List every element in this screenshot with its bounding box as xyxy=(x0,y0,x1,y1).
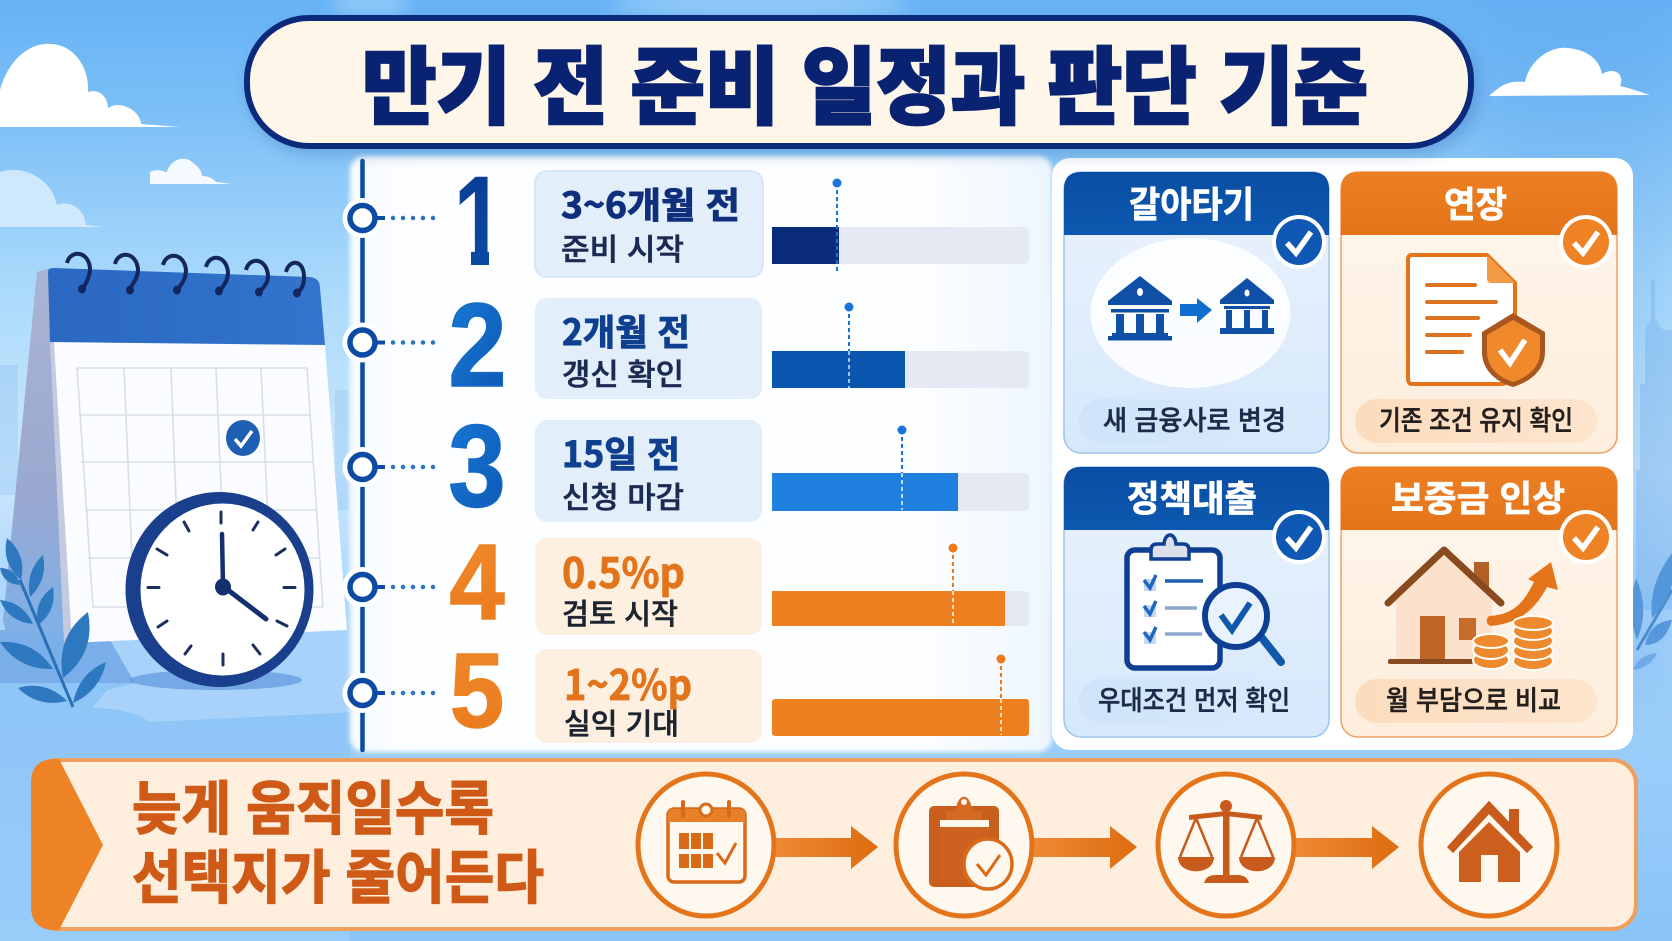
bar 3 xyxy=(772,426,1029,511)
cloud top right xyxy=(1489,48,1650,96)
number 4: 4 xyxy=(449,521,505,642)
calendar page xyxy=(50,342,347,643)
timeline line xyxy=(360,161,365,750)
label 1: 3~6개월 전 xyxy=(561,177,740,229)
icon: checklist and magnifier xyxy=(1127,535,1281,668)
check badge xyxy=(1272,510,1326,564)
label 4: 검토 시작 xyxy=(562,591,678,633)
label 5: 1~2%p xyxy=(564,652,692,713)
card: 갈아타기: 갈아타기 xyxy=(1129,176,1254,228)
card: 정책대출: 정책대출 xyxy=(1127,470,1257,522)
number 5: 5 xyxy=(450,631,504,750)
calendar illustration xyxy=(3,254,347,643)
check badge xyxy=(1559,215,1613,269)
number 2: 2 xyxy=(448,279,507,411)
card: 연장: 연장 xyxy=(1444,176,1507,228)
bar 1 xyxy=(772,178,1029,271)
banner message: 선택지가 줄어든다 xyxy=(132,831,544,915)
title banner: 만기 전 준비 일정과 판단 기준 xyxy=(362,21,1368,142)
calendar rings xyxy=(67,254,304,298)
check badge xyxy=(1272,215,1326,269)
label 1 xyxy=(535,171,763,277)
icon: house circle xyxy=(1421,774,1557,916)
decorative leaves left xyxy=(0,538,106,707)
label 3: 신청 마감 xyxy=(562,473,684,517)
card: 연장 xyxy=(1341,172,1617,453)
label 5: 실익 기대 xyxy=(564,701,679,743)
icon: scales circle xyxy=(1158,774,1294,916)
card: 보증금 인상: 보중금 인상 xyxy=(1391,470,1565,522)
bar 2 xyxy=(772,302,1029,388)
icon: document with shield xyxy=(1408,255,1545,387)
caption pill: 월 부담으로 비교 xyxy=(1386,679,1561,718)
cloud top left xyxy=(0,44,180,127)
number 1: 1 xyxy=(453,149,505,293)
timeline nodes xyxy=(342,198,436,713)
card: 보증금 인상 xyxy=(1341,467,1617,737)
cloud small xyxy=(150,159,232,184)
calendar grid xyxy=(77,368,323,607)
panel: timeline xyxy=(342,149,1052,752)
label 3 xyxy=(535,420,762,522)
arrow 2 xyxy=(1033,826,1137,869)
label 2 xyxy=(535,298,762,399)
number 3: 3 xyxy=(448,401,506,531)
calendar back flap xyxy=(3,268,72,640)
chevron xyxy=(31,759,103,930)
panel: options xyxy=(1052,158,1633,750)
card: 정책대출 xyxy=(1064,467,1329,737)
label 4: 0.5%p xyxy=(562,540,685,601)
bar 4 xyxy=(772,544,1029,626)
check badge xyxy=(1559,510,1613,564)
label 2: 갱신 확인 xyxy=(562,350,684,394)
icon: bank transfer xyxy=(1090,238,1290,388)
cloud left mid xyxy=(0,170,105,227)
label 4 xyxy=(535,538,762,635)
icon: house, coins and rising arrow xyxy=(1388,550,1558,670)
label 2: 2개월 전 xyxy=(562,304,690,356)
arrow 3 xyxy=(1295,826,1399,869)
calendar header xyxy=(48,268,325,345)
banner message xyxy=(132,762,544,915)
caption pill: 우대조건 먼저 확인 xyxy=(1098,679,1290,718)
icon: calendar circle xyxy=(638,774,774,916)
icon: clipboard circle xyxy=(896,774,1032,916)
clock xyxy=(126,492,314,690)
banner message: 늦게 움직일수록 xyxy=(132,762,494,846)
label 1: 준비 시작 xyxy=(561,225,684,269)
bottom banner xyxy=(31,759,1636,930)
label 5 xyxy=(535,649,762,743)
card: 갈아타기 xyxy=(1064,172,1329,453)
label 3: 15일 전 xyxy=(562,426,680,478)
calendar check badge xyxy=(226,420,260,456)
decorative leaves right xyxy=(1631,553,1672,670)
bar 5 xyxy=(772,654,1029,736)
arrow 1 xyxy=(775,826,878,869)
caption pill: 새 금융사로 변경 xyxy=(1103,399,1286,438)
caption pill: 기존 조건 유지 확인 xyxy=(1379,399,1573,438)
caption pill xyxy=(1355,679,1597,723)
